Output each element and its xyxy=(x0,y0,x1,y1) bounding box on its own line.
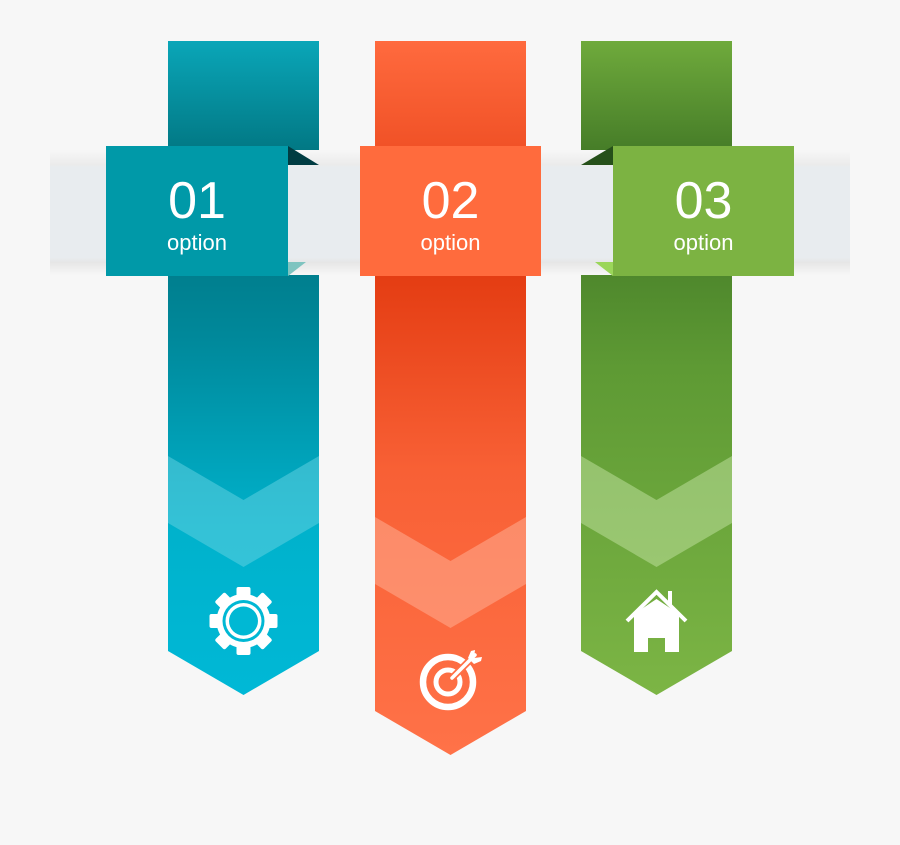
box 02: option xyxy=(421,230,480,255)
background band xyxy=(50,150,850,275)
icon: gear xyxy=(210,587,278,655)
chevron 2 xyxy=(375,517,526,628)
chevron 1 xyxy=(168,456,319,567)
box 01: 01 xyxy=(168,172,226,230)
ribbon 3 xyxy=(581,41,732,695)
box 01 xyxy=(106,146,288,276)
icon: house xyxy=(627,591,686,652)
box 03 xyxy=(613,146,794,276)
folds xyxy=(288,146,319,165)
ribbon 2 xyxy=(375,41,526,755)
box 02: 02 xyxy=(422,172,479,230)
box 02 xyxy=(360,146,541,276)
chevron 3 xyxy=(581,456,732,567)
box 01: option xyxy=(167,230,227,255)
box 03: option xyxy=(674,230,733,255)
box 03: 03 xyxy=(675,172,732,230)
icon: target xyxy=(423,650,482,707)
ribbon 1 xyxy=(168,41,319,695)
